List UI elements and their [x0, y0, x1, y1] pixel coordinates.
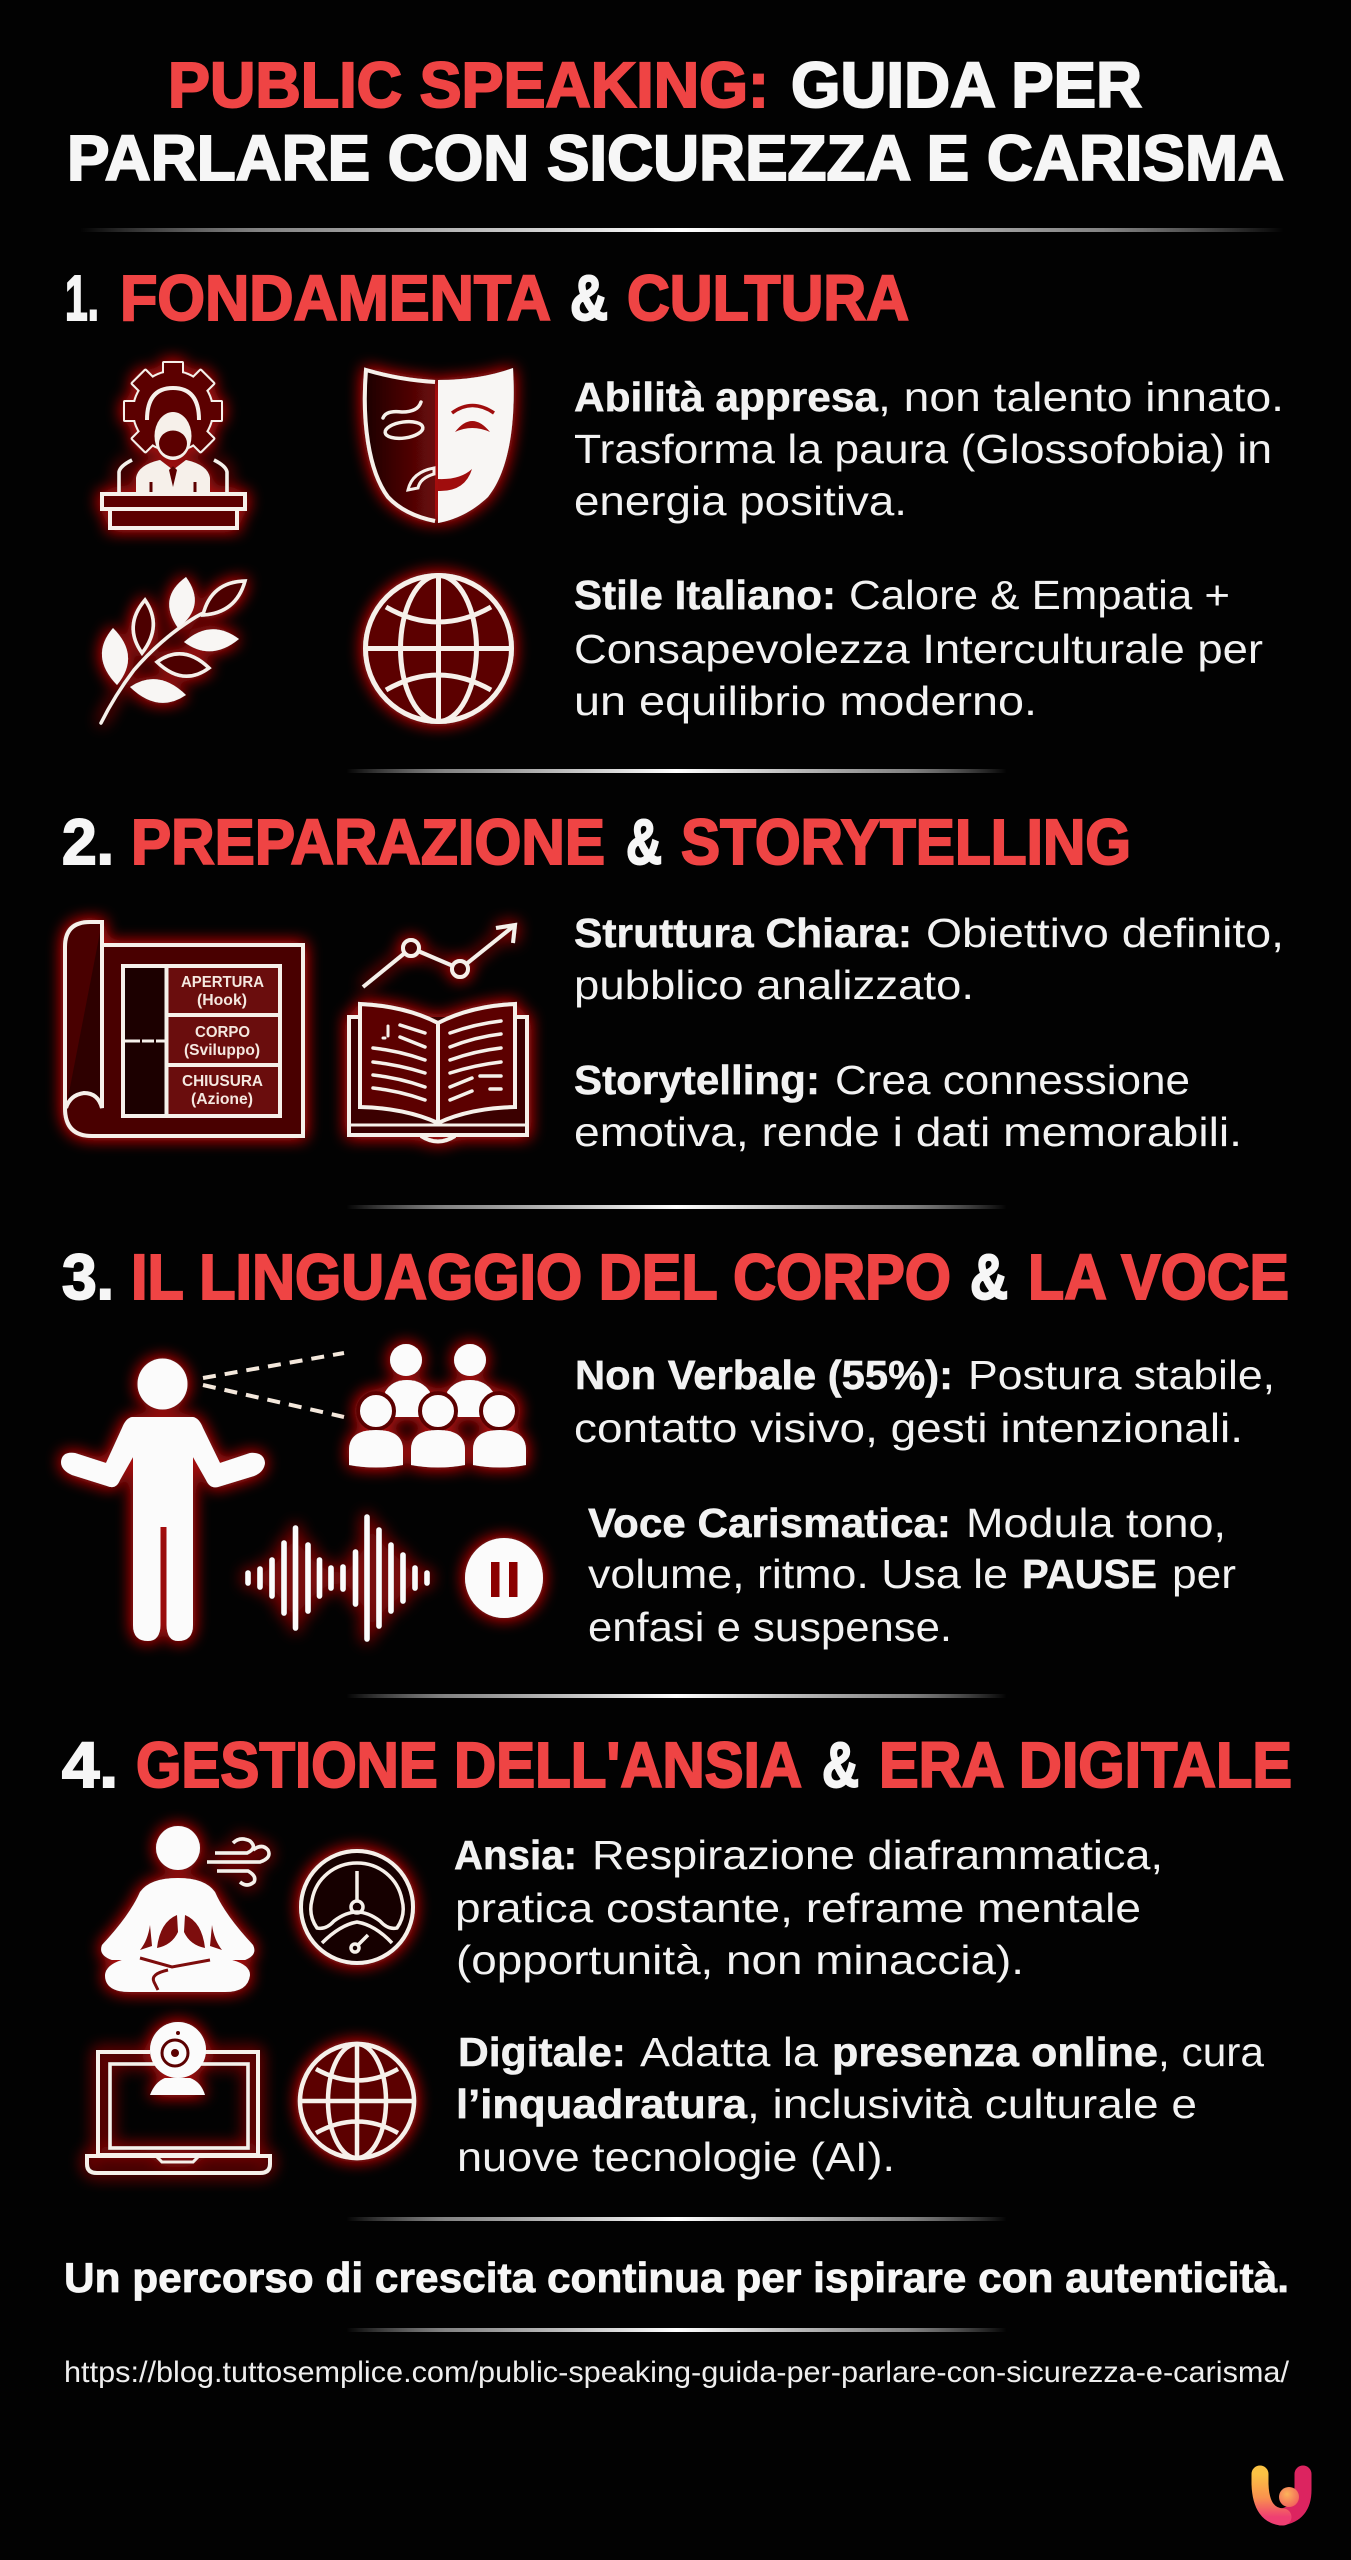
title: GUIDA PER	[791, 49, 1142, 121]
label: chiusura	[182, 1073, 263, 1108]
tagline: Un percorso di crescita continua per ispirare con autenticità.	[64, 2254, 1289, 2301]
text: voce carismatica: PAUSE	[1022, 1551, 1157, 1597]
text: stile italiano: un equilibrio moderno.	[574, 678, 1037, 724]
text: voce carismatica: Voce Carismatica:	[588, 1500, 951, 1546]
text: digitale: nuove tecnologie (AI).	[457, 2134, 895, 2180]
icon: speaker at podium with gear	[102, 363, 245, 528]
icon: globe	[365, 575, 512, 722]
text: digitale: , inclusività culturale e	[747, 2081, 1197, 2127]
icon: laurel branch	[101, 577, 245, 723]
title: PARLARE CON SICUREZZA E CARISMA	[67, 122, 1284, 194]
text: voce carismatica: Modula tono,	[966, 1500, 1226, 1546]
heading: section 2: PREPARAZIONE	[131, 806, 605, 878]
text: ansia: Ansia:	[454, 1832, 577, 1878]
heading: section 1: FONDAMENTA	[120, 262, 551, 334]
text: non verbale: contatto visivo, gesti intenzionali.	[574, 1405, 1243, 1451]
label: apertura: (Hook)	[197, 992, 247, 1009]
text: voce carismatica: volume, ritmo. Usa le	[588, 1551, 1008, 1597]
icon: rising trend line	[363, 925, 515, 987]
panel: gestione dell'ansia ed era digitale	[62, 1729, 1292, 2180]
heading: section 3: &	[970, 1241, 1008, 1313]
label: apertura: APERTURA	[181, 974, 264, 991]
panel: linguaggio del corpo e voce	[61, 1241, 1289, 1650]
panel: fondamenta e cultura	[65, 262, 1284, 724]
heading: section 3: LA VOCE	[1028, 1241, 1289, 1313]
label: corpo: (Sviluppo)	[184, 1042, 260, 1059]
icon: open book	[349, 1004, 527, 1142]
heading: section 1: &	[570, 262, 608, 334]
text: non verbale	[574, 1352, 1275, 1451]
heading: section 1: CULTURA	[627, 262, 909, 334]
text: storytelling: emotiva, rende i dati memorabili.	[574, 1109, 1242, 1155]
text: storytelling: Storytelling:	[574, 1057, 820, 1103]
text: ansia: Respirazione diaframmatica,	[592, 1832, 1163, 1878]
heading: section 2: &	[626, 806, 662, 878]
text: digitale: Digitale:	[458, 2029, 626, 2075]
label: chiusura: (Azione)	[191, 1091, 253, 1108]
heading: section 2: 2.	[62, 806, 114, 878]
heading: section 3: IL LINGUAGGIO DEL CORPO	[131, 1241, 951, 1313]
text: struttura chiara: Struttura Chiara:	[574, 910, 912, 956]
icon: standing person	[61, 1358, 265, 1641]
text: ansia	[454, 1832, 1163, 1983]
text: digitale: presenza online	[832, 2029, 1158, 2075]
heading: section 2: STORYTELLING	[681, 806, 1131, 878]
label: apertura	[181, 974, 264, 1009]
text: voce carismatica	[588, 1500, 1236, 1650]
text: digitale: Adatta la	[640, 2029, 818, 2075]
source url: https://blog.tuttosemplice.com/public-speaking-guida-per-parlare-con-sicurezza-e-carisma/	[64, 2356, 1290, 2389]
heading: section 2	[62, 806, 1131, 878]
heading: section 4: ERA DIGITALE	[879, 1729, 1292, 1801]
icon: dial gauge	[301, 1851, 413, 1963]
text: ansia: pratica costante, reframe mentale	[455, 1885, 1141, 1931]
heading: section 4	[62, 1729, 1292, 1801]
title: PUBLIC SPEAKING:	[168, 49, 769, 121]
text: digitale: , cura	[1158, 2029, 1264, 2075]
text: stile italiano: Stile Italiano:	[574, 572, 836, 618]
heading: section 1: 1.	[65, 262, 99, 334]
text: stile italiano: Consapevolezza Interculturale per	[574, 626, 1263, 672]
text: non verbale: Postura stabile,	[968, 1352, 1275, 1398]
text: abilità appresa: , non talento innato.	[878, 374, 1284, 420]
text: abilità appresa	[574, 374, 1284, 524]
title	[67, 49, 1284, 194]
text: storytelling	[574, 1057, 1242, 1155]
text: digitale	[456, 2029, 1264, 2180]
heading: section 4: GESTIONE DELL'ANSIA	[136, 1729, 802, 1801]
icon: small globe	[300, 2044, 414, 2158]
text: stile italiano: Calore & Empatia +	[849, 572, 1230, 618]
text: struttura chiara: pubblico analizzato.	[574, 962, 974, 1008]
heading: section 1	[65, 262, 909, 334]
icon: speech blueprint scroll	[65, 922, 303, 1136]
text: struttura chiara	[574, 910, 1284, 1008]
heading: section 4: 4.	[62, 1729, 118, 1801]
text: ansia: (opportunità, non minaccia).	[456, 1937, 1024, 1983]
text: stile italiano	[574, 572, 1263, 724]
label: corpo: CORPO	[195, 1024, 250, 1041]
label: corpo	[184, 1024, 260, 1059]
text: abilità appresa: Abilità appresa	[574, 374, 879, 420]
icon: audience	[349, 1344, 526, 1468]
text: digitale: l’inquadratura	[456, 2081, 748, 2127]
icon: laptop with webcam	[87, 2022, 270, 2173]
icon: meditating figure with lungs	[101, 1826, 269, 1992]
icon: brand logo	[1260, 2474, 1303, 2517]
icon: theatre mask	[365, 368, 514, 523]
text: voce carismatica: per	[1172, 1551, 1236, 1597]
text: struttura chiara: Obiettivo definito,	[926, 910, 1284, 956]
text: abilità appresa: energia positiva.	[574, 478, 907, 524]
heading: section 4: &	[822, 1729, 859, 1801]
label: chiusura: CHIUSURA	[182, 1073, 263, 1090]
text: non verbale: Non Verbale (55%):	[575, 1352, 953, 1398]
panel: preparazione e storytelling	[62, 806, 1284, 1155]
icon: pause button	[465, 1538, 543, 1618]
icon: sound waveform	[248, 1517, 427, 1639]
heading: section 3: 3.	[62, 1241, 114, 1313]
text: abilità appresa: Trasforma la paura (Glossofobia) in	[574, 426, 1272, 472]
text: storytelling: Crea connessione	[835, 1057, 1190, 1103]
text: voce carismatica: enfasi e suspense.	[588, 1604, 952, 1650]
arrow: gaze dashes	[203, 1353, 344, 1417]
